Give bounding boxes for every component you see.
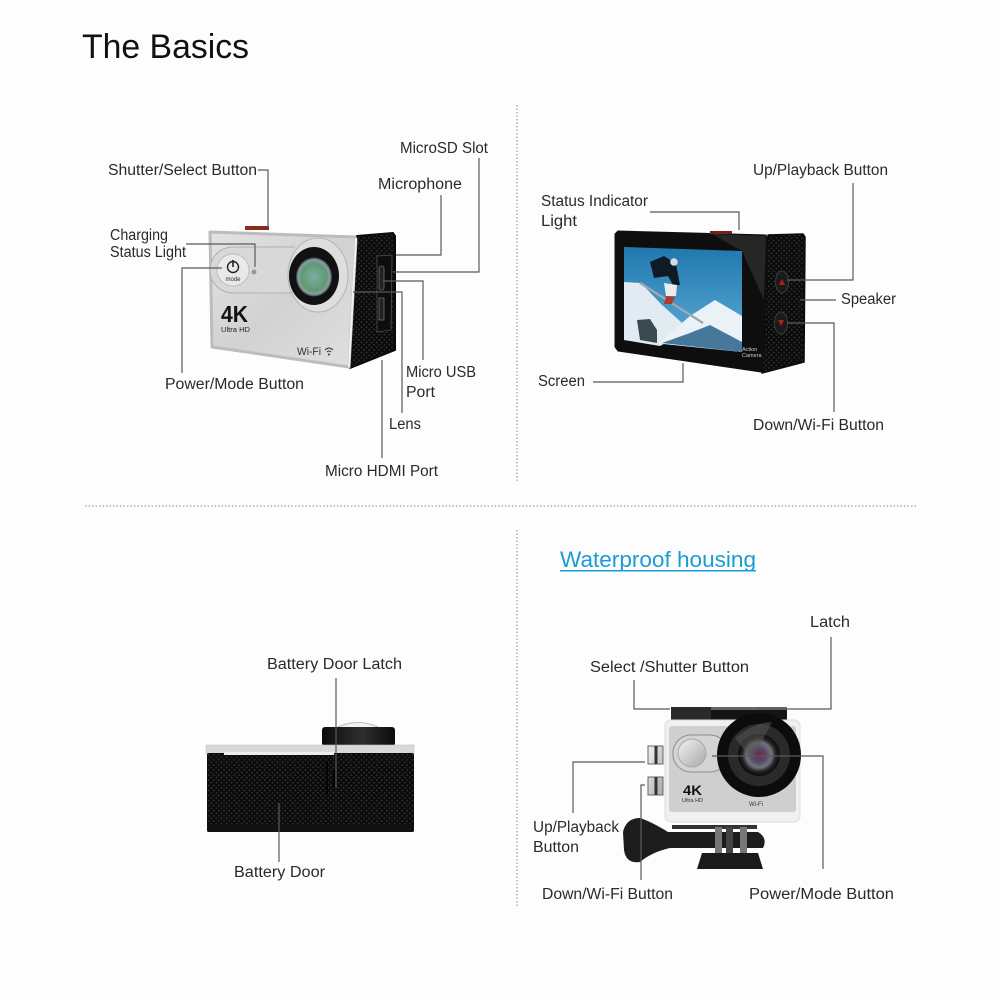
label: Down/Wi-Fi Button — [753, 323, 884, 434]
label: Micro USB Port — [383, 281, 476, 401]
logo: housing 4K — [682, 782, 763, 808]
label: Microphone: Microphone — [378, 176, 462, 193]
label: Charging Status Light — [110, 227, 255, 267]
icon: power symbol — [228, 260, 238, 272]
camera back illustration: Camera — [742, 353, 763, 359]
label: Charging Status Light: Status Light — [110, 244, 187, 261]
label: Status Indicator Light: Status Indicator — [541, 193, 648, 210]
label: Status Indicator Light — [541, 193, 739, 230]
label: Select /Shutter Button — [590, 659, 749, 709]
label: Micro HDMI Port — [325, 360, 439, 480]
label: Shutter/Select Button — [108, 162, 268, 227]
label: Micro USB Port: Port — [406, 384, 436, 401]
logo: 4K Ultra HD: Ultra HD — [221, 325, 251, 334]
label: Micro USB Port: Micro USB — [406, 364, 476, 381]
title: The Basics — [82, 28, 249, 66]
label: Screen: Screen — [538, 373, 585, 390]
logo: housing 4K: Wi-Fi — [749, 802, 763, 808]
label: Up/Playback Button: Button — [533, 839, 579, 856]
label: Power/Mode Button: Power/Mode Button — [165, 376, 304, 393]
label: Screen — [538, 363, 683, 390]
label: Speaker — [800, 291, 896, 308]
label: Down/Wi-Fi Button: Down/Wi-Fi Button — [542, 886, 673, 903]
screen image: skier — [624, 247, 742, 352]
panel: front view of camera — [108, 140, 489, 480]
label: Shutter/Select Button: Shutter/Select Button — [108, 162, 257, 179]
label: MicroSD Slot — [393, 140, 489, 272]
camera front illustration: mode — [225, 277, 241, 283]
camera back illustration: Action — [742, 347, 757, 353]
camera front illustration — [210, 226, 395, 368]
label: Power/Mode Button — [165, 268, 304, 393]
label: Up/Playback Button — [753, 162, 888, 280]
label: Up/Playback Button: Up/Playback — [533, 819, 619, 836]
logo: 4K Ultra HD: 4K — [221, 301, 248, 327]
panel: waterproof housing — [533, 547, 894, 903]
panel: side view of camera — [206, 656, 414, 881]
label: Micro HDMI Port: Micro HDMI Port — [325, 463, 439, 480]
label: Select /Shutter Button: Select /Shutter Button — [590, 659, 749, 676]
label: Latch: Latch — [810, 614, 850, 631]
label: MicroSD Slot: MicroSD Slot — [400, 140, 489, 157]
label: Up/Playback Button — [533, 762, 645, 856]
panel: back view of camera — [538, 162, 896, 434]
camera side illustration — [206, 722, 414, 832]
label: Battery Door — [234, 803, 325, 881]
label: Status Indicator Light: Light — [541, 213, 578, 230]
label: Microphone — [378, 176, 462, 255]
label: Lens: Lens — [389, 416, 421, 433]
heading: Waterproof housing: Waterproof housing — [560, 547, 756, 572]
label: Lens — [353, 292, 421, 433]
label: Down/Wi-Fi Button: Down/Wi-Fi Button — [753, 417, 884, 434]
label: Battery Door Latch — [267, 656, 402, 788]
logo: housing 4K: 4K — [683, 782, 702, 798]
label: Battery Door Latch: Battery Door Latch — [267, 656, 402, 673]
label: Speaker: Speaker — [841, 291, 896, 308]
housing illustration — [623, 707, 801, 869]
logo: Wi-Fi: Wi-Fi — [297, 346, 321, 358]
label: Down/Wi-Fi Button — [542, 785, 673, 903]
logo: housing 4K: Ultra HD — [682, 798, 703, 804]
label: Latch — [757, 614, 850, 709]
label: Battery Door: Battery Door — [234, 864, 325, 881]
label: Power/Mode Button: Power/Mode Button — [749, 886, 894, 903]
camera back illustration — [615, 231, 805, 373]
label: Charging Status Light: Charging — [110, 227, 168, 244]
label: Power/Mode Button — [712, 756, 894, 903]
label: Up/Playback Button: Up/Playback Button — [753, 162, 888, 179]
